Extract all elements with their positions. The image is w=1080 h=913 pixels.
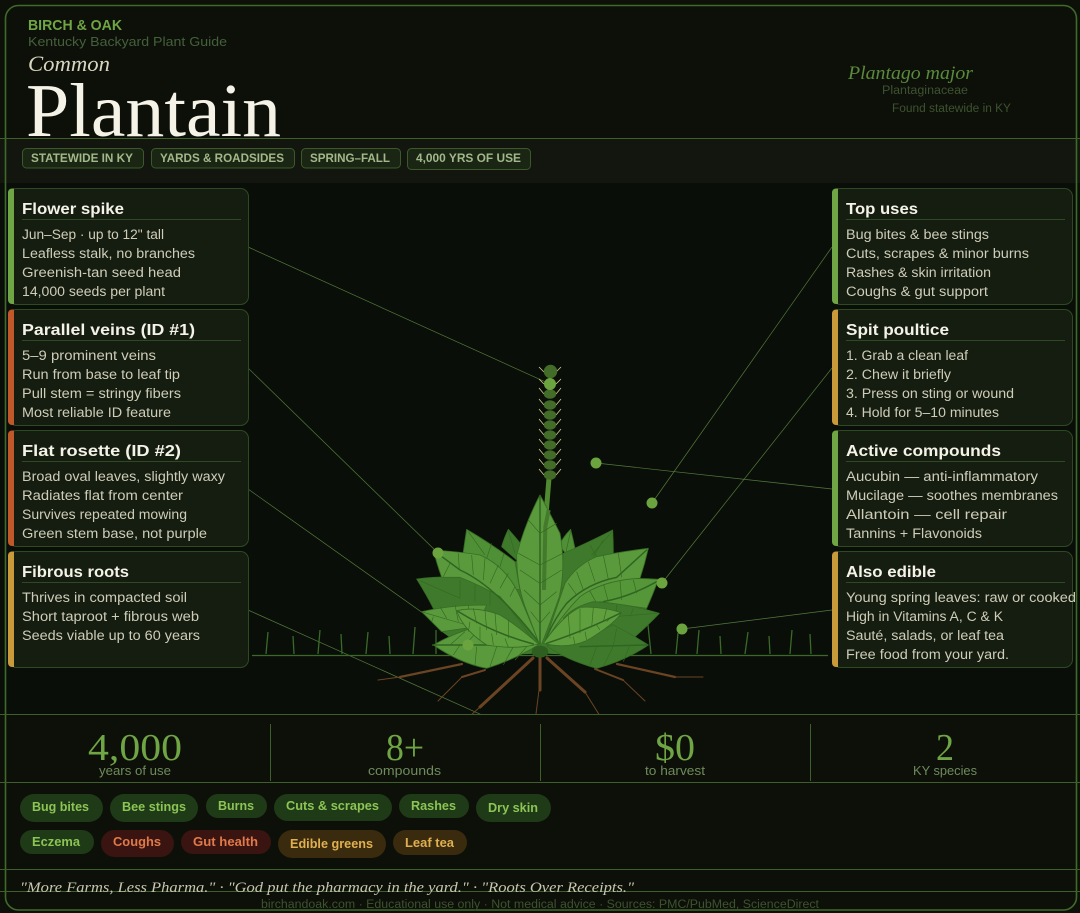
spike stalk	[546, 478, 549, 515]
panel: flower spike: Jun–Sep · up to 12" tall	[22, 227, 164, 242]
plant: flower spike	[539, 365, 561, 515]
tags row: SPRING–FALL	[310, 151, 390, 165]
large upper-right leaf	[545, 548, 648, 642]
panel: flat rosette: Broad oval leaves, slightly waxy	[22, 469, 225, 484]
panel: spit poultice: 3. Press on sting or wound	[846, 386, 1014, 401]
low right dark leaf	[563, 602, 659, 637]
header: brand	[28, 17, 227, 49]
use chips: Gut health	[193, 834, 258, 849]
panel: top uses: Rashes & skin irritation	[846, 265, 991, 280]
stats row: to harvest	[645, 764, 706, 778]
roots	[378, 658, 703, 716]
rosette crown	[532, 646, 548, 658]
panel: also edible: Also edible	[846, 564, 936, 581]
panel: also edible: High in Vitamins A, C & K	[846, 609, 1003, 624]
panel: parallel veins: Pull stem = stringy fibers	[22, 386, 181, 401]
seed head	[544, 365, 557, 480]
tags row: YARDS & ROADSIDES	[160, 151, 284, 165]
use chips: Cuts & scrapes	[286, 798, 379, 813]
panel: top uses: Bug bites & bee stings	[846, 227, 989, 242]
panel: flat rosette: Survives repeated mowing	[22, 507, 187, 522]
leader lines	[248, 247, 832, 715]
panel: flower spike	[8, 188, 248, 304]
panel: parallel veins: Parallel veins (ID #1)	[22, 322, 195, 339]
ground line and grass	[252, 625, 828, 656]
panel: top uses: Cuts, scrapes & minor burns	[846, 246, 1029, 261]
panel: fibrous roots: Fibrous roots	[22, 564, 129, 581]
spike whiskers	[539, 367, 561, 475]
panel: parallel veins	[8, 310, 248, 426]
lower left leaf	[433, 627, 538, 668]
panel: active compounds: Aucubin — anti-inflammatory	[846, 469, 1038, 484]
title: Plantain	[26, 69, 281, 153]
quotes line: "More Farms, Less Pharma." · "God put the pharmacy in the yard." · "Roots Over Receipts."	[20, 880, 635, 896]
stats row: KY species	[913, 764, 977, 778]
panel: active compounds: Allantoin — cell repair	[846, 507, 1008, 522]
stats row: 4,000	[88, 727, 182, 769]
central leaf	[517, 495, 563, 644]
tags row	[22, 148, 530, 170]
lower right dark leaf	[547, 625, 648, 668]
botanical name block: Plantaginaceae	[882, 85, 968, 97]
stats row: compounds	[368, 764, 441, 778]
rosette backing	[433, 553, 647, 657]
stats row: years of use	[99, 764, 171, 778]
front right leaf	[543, 607, 622, 646]
panel: top uses: Coughs & gut support	[846, 284, 988, 299]
use chips: Bug bites	[32, 799, 89, 814]
panel: active compounds: Tannins + Flavonoids	[846, 526, 982, 541]
panel: also edible: Sauté, salads, or leaf tea	[846, 628, 1005, 643]
tags row: 4,000 YRS OF USE	[416, 151, 521, 165]
use chips: Eczema	[32, 834, 81, 849]
use chips	[20, 794, 551, 858]
title: Common	[28, 51, 110, 76]
panel: active compounds: Active compounds	[846, 443, 1001, 460]
panel: also edible: Free food from your yard.	[846, 647, 1009, 662]
panel: parallel veins: Run from base to leaf tip	[22, 367, 180, 382]
panel: top uses	[832, 188, 1072, 304]
panel: active compounds: Mucilage — soothes membranes	[846, 488, 1058, 503]
panel: active compounds	[832, 430, 1072, 546]
panel: fibrous roots	[8, 552, 248, 668]
panel: also edible	[832, 552, 1076, 668]
mid layer leaves	[417, 577, 533, 640]
use chips: Leaf tea	[405, 835, 455, 850]
panel: flower spike: Flower spike	[22, 201, 124, 218]
use chips: Dry skin	[488, 800, 538, 815]
panel: parallel veins: 5–9 prominent veins	[22, 348, 156, 363]
use chips: Edible greens	[290, 836, 373, 851]
panel: flat rosette: Green stem base, not purple	[22, 526, 207, 541]
specimen area background	[0, 183, 1080, 714]
panel: spit poultice	[832, 310, 1072, 426]
panel: spit poultice: Spit poultice	[846, 322, 949, 339]
stats row: 8+	[386, 727, 424, 769]
large upper-left leaf	[433, 550, 539, 643]
panel: flat rosette: Flat rosette (ID #2)	[22, 443, 181, 460]
panel: flower spike: 14,000 seeds per plant	[22, 284, 165, 299]
panel: fibrous roots: Seeds viable up to 60 years	[22, 628, 200, 643]
panel: top uses: Top uses	[846, 201, 918, 218]
use chips: Burns	[218, 798, 254, 813]
stats row	[88, 727, 977, 778]
use chips: Coughs	[113, 834, 161, 849]
use chips: Rashes	[411, 798, 456, 813]
panel: flat rosette	[8, 430, 248, 546]
back leaves	[502, 529, 522, 560]
panel: fibrous roots: Thrives in compacted soil	[22, 590, 187, 605]
use chips: Bee stings	[122, 799, 186, 814]
upper leaves	[460, 529, 520, 590]
botanical name block	[847, 63, 1011, 115]
panel: parallel veins: Most reliable ID feature	[22, 405, 171, 420]
callout markers	[432, 378, 688, 650]
panel: fibrous roots: Short taproot + fibrous web	[22, 609, 199, 624]
panel: spit poultice: 4. Hold for 5–10 minutes	[846, 405, 999, 420]
tag band background	[0, 139, 1080, 183]
front left leaf	[457, 609, 538, 647]
header: brand: BIRCH & OAK	[28, 17, 122, 34]
low left leaf	[422, 605, 487, 632]
panel: spit poultice: 2. Chew it briefly	[846, 367, 951, 382]
panel: flat rosette: Radiates flat from center	[22, 488, 184, 503]
panel: flower spike: Greenish-tan seed head	[22, 265, 181, 280]
botanical name block: Found statewide in KY	[892, 103, 1011, 115]
panel: spit poultice: 1. Grab a clean leaf	[846, 348, 968, 363]
panel: flower spike: Leafless stalk, no branches	[22, 246, 195, 261]
botanical name block: Plantago major	[847, 63, 974, 84]
tags row: STATEWIDE IN KY	[31, 151, 133, 165]
stats row: $0	[655, 727, 695, 769]
panel: also edible: Young spring leaves: raw or cooked	[846, 590, 1076, 605]
plant: leaf rosette	[417, 495, 659, 668]
footer: birchandoak.com · Educational use only · Not medical advice · Sources: PMC/PubMed, ScienceDirect	[261, 899, 820, 911]
header: brand: Kentucky Backyard Plant Guide	[28, 34, 227, 49]
stats row: 2	[936, 727, 954, 769]
